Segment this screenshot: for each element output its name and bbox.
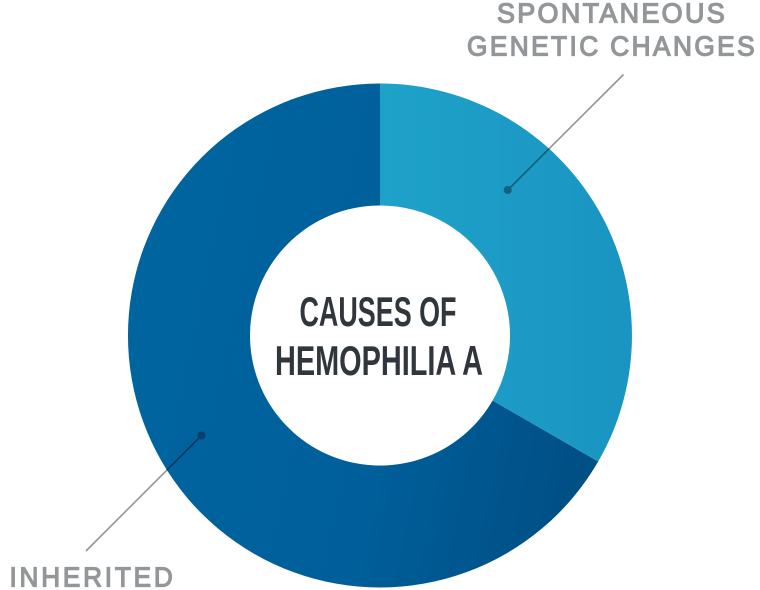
leader line: inherited <box>86 432 206 551</box>
donut chart <box>128 84 632 588</box>
center title: HEMOPHILIA A <box>275 337 483 384</box>
center title <box>275 288 483 384</box>
segment: inherited <box>128 84 598 588</box>
center title: CAUSES OF <box>300 288 456 335</box>
segment: spontaneous genetic changes <box>380 84 632 462</box>
leader line: spontaneous genetic changes <box>504 74 624 194</box>
label: spontaneous genetic changes <box>467 0 757 62</box>
